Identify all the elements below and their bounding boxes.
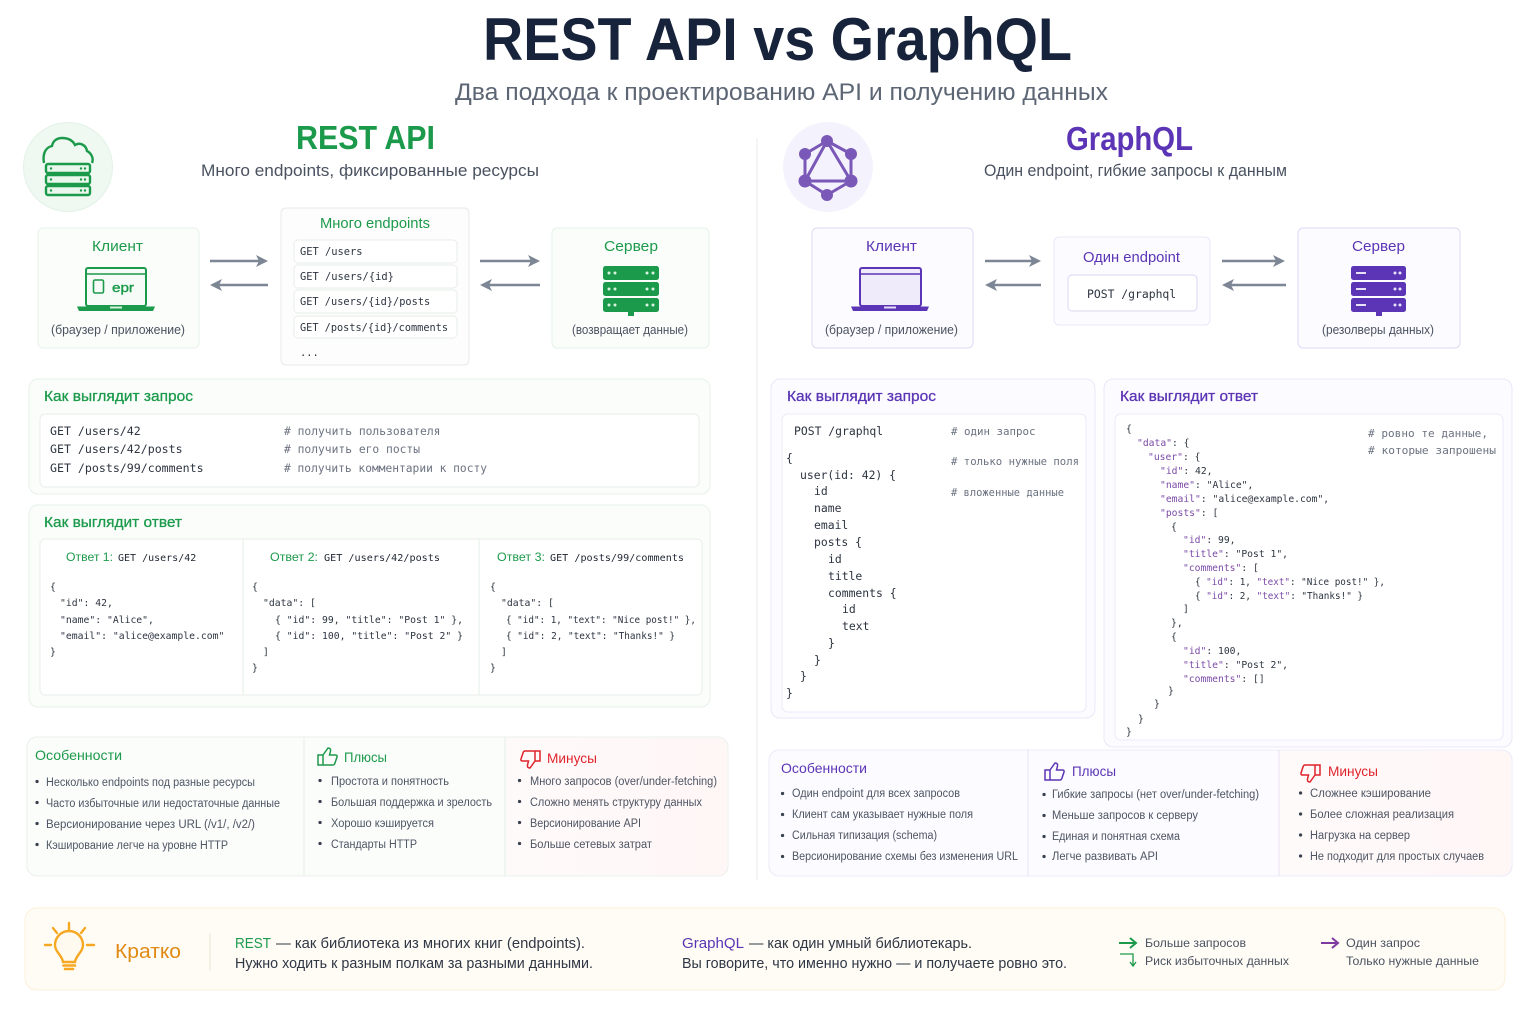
response code: "data": { — [1137, 438, 1190, 449]
text: GraphQL summary: — как один умный библиотекарь. — [749, 936, 972, 952]
response 2 — [252, 550, 463, 674]
response code: # ровно те данные, — [1368, 427, 1488, 440]
response code — [1115, 414, 1503, 740]
legend: GraphQL — [1321, 936, 1479, 968]
text: REST summary: Нужно ходить к разным полкам за разными данными. — [235, 956, 593, 972]
icon: server — [1351, 266, 1406, 316]
response code: { — [1126, 424, 1132, 435]
response 2: ] — [263, 647, 269, 658]
icon: cloud with server stack — [24, 122, 112, 212]
response code: "id": 42, — [1160, 466, 1213, 477]
panel: GraphQL single endpoint — [1054, 237, 1210, 325]
query code: # вложенные данные — [951, 486, 1064, 499]
features: Версионирование схемы без изменения URL — [792, 851, 1019, 863]
panel: summary — [25, 908, 1505, 990]
panel: GraphQL response — [1104, 379, 1512, 747]
code block: # получить его посты — [284, 443, 420, 456]
response code: "name": "Alice", — [1160, 480, 1253, 491]
pros: Простота и понятность — [331, 776, 449, 788]
features — [781, 760, 1019, 863]
text: GraphQL summary: Вы говорите, что именно нужно — и получаете ровно это. — [682, 956, 1067, 972]
text: GraphQL tagline: Один endpoint, гибкие запросы к данным — [984, 162, 1287, 180]
response 2: Ответ 2: — [270, 550, 318, 564]
query code: } — [828, 636, 835, 650]
response 1: { — [50, 582, 56, 593]
query code: # один запрос — [951, 425, 1036, 438]
icon: server — [603, 266, 659, 316]
response 3: "data": [ — [501, 598, 554, 609]
features: Особенности — [35, 747, 122, 763]
query code: user(id: 42) { — [800, 468, 896, 482]
icon: laptop — [77, 268, 155, 311]
legend: GraphQL: Один запрос — [1346, 936, 1420, 950]
features: Особенности — [781, 760, 867, 776]
icon: GraphQL logo — [783, 122, 873, 212]
response code: "user": { — [1148, 452, 1200, 463]
text: GraphQL summary: GraphQL — [682, 936, 744, 952]
title: REST API vs GraphQL — [483, 6, 1072, 73]
cons — [1300, 764, 1484, 863]
query code: # только нужные поля — [951, 455, 1079, 468]
icon: thumbs down — [521, 751, 540, 768]
query code: id — [842, 602, 856, 616]
text: (браузер / приложение) — [51, 322, 185, 337]
panel: REST features, pros and cons — [27, 737, 728, 876]
response code: { "id": 2, "text": "Thanks!" } — [1195, 591, 1363, 602]
icon: laptop — [851, 268, 929, 311]
pros: Меньше запросов к серверу — [1052, 810, 1198, 822]
code block — [40, 414, 699, 487]
features: Клиент сам указывает нужные поля — [792, 809, 973, 821]
panel: REST server — [552, 228, 709, 348]
text: (резолверы данных) — [1322, 322, 1434, 337]
response 2: GET /users/42/posts — [324, 553, 440, 564]
panel: REST column header — [24, 119, 539, 212]
response 1: "name": "Alice", — [60, 615, 154, 626]
icon: light bulb — [45, 923, 94, 969]
response code: } — [1154, 699, 1160, 710]
response 3: { "id": 2, "text": "Thanks!" } — [506, 631, 675, 642]
query code: title — [828, 569, 862, 583]
cons: Минусы — [1328, 764, 1378, 779]
icon: laptop: epr — [112, 280, 135, 295]
pros — [318, 748, 492, 851]
endpoint box — [1068, 275, 1197, 311]
response code: "comments": [] — [1183, 674, 1265, 685]
text: REST tagline: Много endpoints, фиксированные ресурсы — [201, 161, 539, 180]
cons: Не подходит для простых случаев — [1310, 851, 1484, 863]
response 2: { "id": 100, "title": "Post 2" } — [275, 631, 463, 642]
query code: } — [814, 653, 821, 667]
endpoint list: GET /users/{id} — [300, 271, 394, 283]
text: REST summary — [235, 936, 593, 972]
features — [35, 747, 280, 852]
text: GraphQL summary — [682, 936, 1067, 972]
response code: "id": 99, — [1183, 535, 1236, 546]
cons: Много запросов (over/under-fetching) — [530, 776, 717, 788]
code block: # получить пользователя — [284, 425, 440, 438]
cons: Больше сетевых затрат — [530, 839, 653, 851]
query code — [782, 414, 1086, 712]
endpoint list: GET /users — [300, 246, 363, 258]
response 3: GET /posts/99/comments — [550, 553, 684, 564]
arrow: GraphQL client to endpoint — [985, 255, 1041, 291]
panel: GraphQL server — [1298, 228, 1460, 348]
endpoint list: GET /users/{id}/posts — [300, 296, 430, 308]
arrow: REST endpoints to server — [480, 255, 540, 291]
response code: { — [1171, 632, 1177, 643]
response code: } — [1126, 727, 1132, 738]
pros: Большая поддержка и зрелость — [331, 797, 492, 809]
response 2: { — [252, 582, 258, 593]
icon: thumbs down — [1301, 765, 1320, 782]
heading: Клиент — [92, 238, 143, 255]
query code: posts { — [814, 535, 862, 549]
heading: Сервер — [604, 238, 658, 255]
heading: Как выглядит ответ — [1120, 388, 1258, 405]
response 3: } — [490, 663, 496, 674]
text: REST summary: REST — [235, 936, 271, 952]
pros: Легче развивать API — [1052, 851, 1158, 863]
endpoint box: POST /graphql — [1087, 287, 1176, 301]
text: (возвращает данные) — [572, 322, 688, 337]
response code: "comments": [ — [1183, 563, 1259, 574]
heading: Как выглядит запрос — [787, 388, 937, 405]
features: Один endpoint для всех запросов — [792, 788, 960, 800]
cons: Сложнее кэширование — [1310, 788, 1431, 800]
response 1: GET /users/42 — [118, 553, 196, 564]
query code: text — [842, 619, 869, 633]
pros — [1044, 763, 1259, 863]
query code: comments { — [828, 586, 897, 600]
heading: Много endpoints — [320, 216, 430, 232]
response 3: { "id": 1, "text": "Nice post!" }, — [506, 615, 696, 626]
cons: Сложно менять структуру данных — [530, 797, 702, 809]
endpoint list: ... — [300, 347, 319, 359]
response code: "id": 100, — [1183, 646, 1241, 657]
pros: Единая и понятная схема — [1052, 831, 1181, 843]
panel: GraphQL client — [812, 228, 973, 348]
panel: GraphQL request — [771, 379, 1095, 718]
response 1 — [50, 550, 224, 658]
text: (браузер / приложение) — [825, 322, 958, 337]
legend: REST — [1119, 936, 1289, 968]
query code: id — [828, 552, 842, 566]
heading: Клиент — [866, 238, 917, 255]
response 2: } — [252, 663, 258, 674]
heading: GraphQL: GraphQL — [1066, 120, 1193, 157]
endpoint list — [294, 240, 457, 359]
features: Несколько endpoints под разные ресурсы — [46, 777, 255, 789]
query code: id — [814, 484, 828, 498]
response 3: ] — [501, 647, 507, 658]
arrow: REST client to endpoints — [210, 255, 268, 291]
pros: Гибкие запросы (нет over/under-fetching) — [1052, 789, 1259, 801]
query code: } — [786, 686, 793, 700]
response code: { — [1171, 522, 1177, 533]
response code: "posts": [ — [1160, 508, 1218, 519]
heading: Как выглядит ответ — [44, 514, 182, 531]
response 3: Ответ 3: — [497, 550, 545, 564]
response code: }, — [1171, 618, 1183, 629]
query code: { — [786, 451, 793, 465]
cons: Версионирование API — [530, 818, 641, 830]
heading: Один endpoint — [1083, 250, 1180, 266]
response code: "email": "alice@example.com", — [1160, 494, 1329, 505]
panel: REST many endpoints — [281, 208, 469, 365]
endpoint list: GET /posts/{id}/comments — [300, 322, 448, 334]
query code: name — [814, 501, 842, 515]
query code: email — [814, 518, 848, 532]
legend: REST: Больше запросов — [1145, 936, 1246, 950]
response code: { "id": 1, "text": "Nice post!" }, — [1195, 577, 1385, 588]
legend: GraphQL: Только нужные данные — [1346, 954, 1479, 968]
query code: } — [800, 669, 807, 683]
cons — [520, 751, 717, 851]
code block: GET /users/42/posts — [50, 442, 183, 456]
panel: REST response — [29, 505, 710, 707]
subtitle: Два подхода к проектированию API и получению данных — [455, 79, 1108, 106]
response code: "title": "Post 1", — [1183, 549, 1288, 560]
arrow: GraphQL endpoint to server — [1222, 255, 1286, 291]
response 1: Ответ 1: — [66, 550, 113, 564]
heading: Кратко: Кратко — [115, 941, 181, 963]
features: Кэширование легче на уровне HTTP — [46, 840, 228, 852]
features: Версионирование через URL (/v1/, /v2/) — [46, 819, 255, 831]
icon: thumbs up — [318, 748, 337, 765]
response 3 — [490, 550, 696, 674]
response 2: "data": [ — [263, 598, 316, 609]
icon: thumbs up — [1045, 763, 1064, 780]
response code: "title": "Post 2", — [1183, 660, 1288, 671]
pros: Стандарты HTTP — [331, 839, 417, 851]
code block: # получить комментарии к посту — [284, 462, 487, 475]
features: Часто избыточные или недостаточные данные — [46, 798, 280, 810]
panel: REST client — [38, 228, 199, 348]
text: REST summary: — как библиотека из многих книг (endpoints). — [276, 936, 585, 952]
features: Сильная типизация (schema) — [792, 830, 937, 842]
response code: } — [1138, 714, 1144, 725]
cons: Более сложная реализация — [1310, 809, 1454, 821]
response code: # которые запрошены — [1368, 444, 1496, 457]
pros: Плюсы — [344, 750, 387, 765]
code block: GET /users/42 — [50, 424, 141, 438]
cons: Нагрузка на сервер — [1310, 830, 1410, 842]
cons: Минусы — [547, 751, 597, 766]
response code: } — [1168, 686, 1174, 697]
response 1: "id": 42, — [60, 598, 113, 609]
response 1: "email": "alice@example.com" — [60, 631, 224, 642]
pros: Хорошо кэшируется — [331, 818, 434, 830]
panel: GraphQL column header — [783, 120, 1287, 212]
response 2: { "id": 99, "title": "Post 1" }, — [275, 615, 463, 626]
response code: ] — [1183, 604, 1189, 615]
heading: Сервер — [1352, 238, 1405, 255]
code block: GET /posts/99/comments — [50, 461, 204, 475]
legend: REST: Риск избыточных данных — [1145, 954, 1289, 968]
heading: Как выглядит запрос — [44, 388, 194, 405]
panel: REST request — [29, 379, 710, 494]
pros: Плюсы — [1072, 764, 1116, 779]
panel: GraphQL features, pros and cons — [769, 750, 1512, 876]
query code: POST /graphql — [794, 424, 883, 438]
response 1: } — [50, 647, 56, 658]
response 3: { — [490, 582, 496, 593]
heading: REST API: REST API — [296, 119, 435, 156]
